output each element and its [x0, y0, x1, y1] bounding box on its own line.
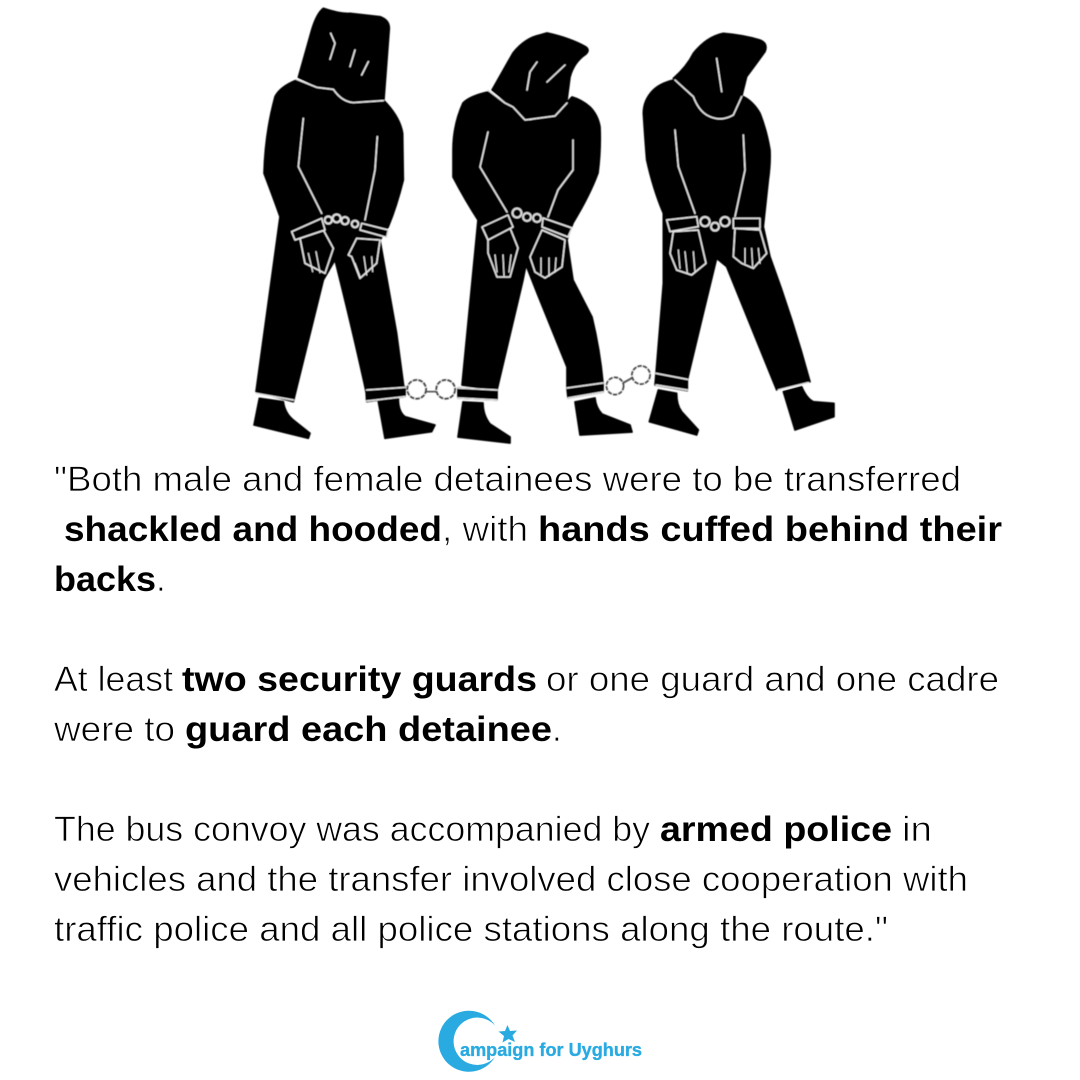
paragraph: shackled and hooded: .	[156, 560, 166, 599]
paragraph: bus convoy: traffic police and all police stations along the route."	[54, 910, 888, 949]
paragraph: security guards: At least	[54, 660, 173, 699]
paragraph: shackled and hooded: , with	[442, 510, 528, 549]
paragraph: shackled and hooded: shackled and hooded	[64, 510, 442, 549]
illustration: three hooded shackled detainees	[254, 8, 834, 443]
paragraph: security guards: or one guard and one cadre	[546, 660, 999, 699]
paragraph: shackled and hooded: backs	[54, 560, 156, 599]
paragraph: security guards: two security guards	[182, 660, 537, 699]
paragraph: bus convoy	[54, 810, 968, 949]
figure: first detainee	[254, 8, 455, 438]
paragraph: shackled and hooded	[54, 460, 1002, 599]
paragraph: bus convoy: The bus convoy was accompanied by	[54, 810, 651, 849]
icon: crescent	[438, 1011, 495, 1072]
paragraph: security guards: were to	[53, 710, 175, 749]
paragraph: security guards: guard each detainee	[185, 710, 552, 749]
paragraph: bus convoy: armed police	[660, 810, 892, 849]
logo: Campaign for Uyghurs	[438, 1011, 642, 1072]
paragraph: shackled and hooded: "Both male and female detainees were to be transferred	[54, 460, 961, 499]
logo wordmark: ampaign for Uyghurs	[460, 1039, 642, 1060]
quote text	[53, 460, 1002, 949]
icon: star	[498, 1025, 517, 1042]
paragraph: security guards: .	[552, 710, 562, 749]
figure: second detainee	[453, 33, 650, 443]
paragraph: bus convoy: in	[902, 810, 932, 849]
figure: third detainee	[643, 33, 834, 435]
paragraph: security guards	[53, 660, 999, 749]
paragraph: shackled and hooded: hands cuffed behind their	[538, 510, 1002, 549]
paragraph: bus convoy: vehicles and the transfer involved close cooperation with	[54, 860, 968, 899]
